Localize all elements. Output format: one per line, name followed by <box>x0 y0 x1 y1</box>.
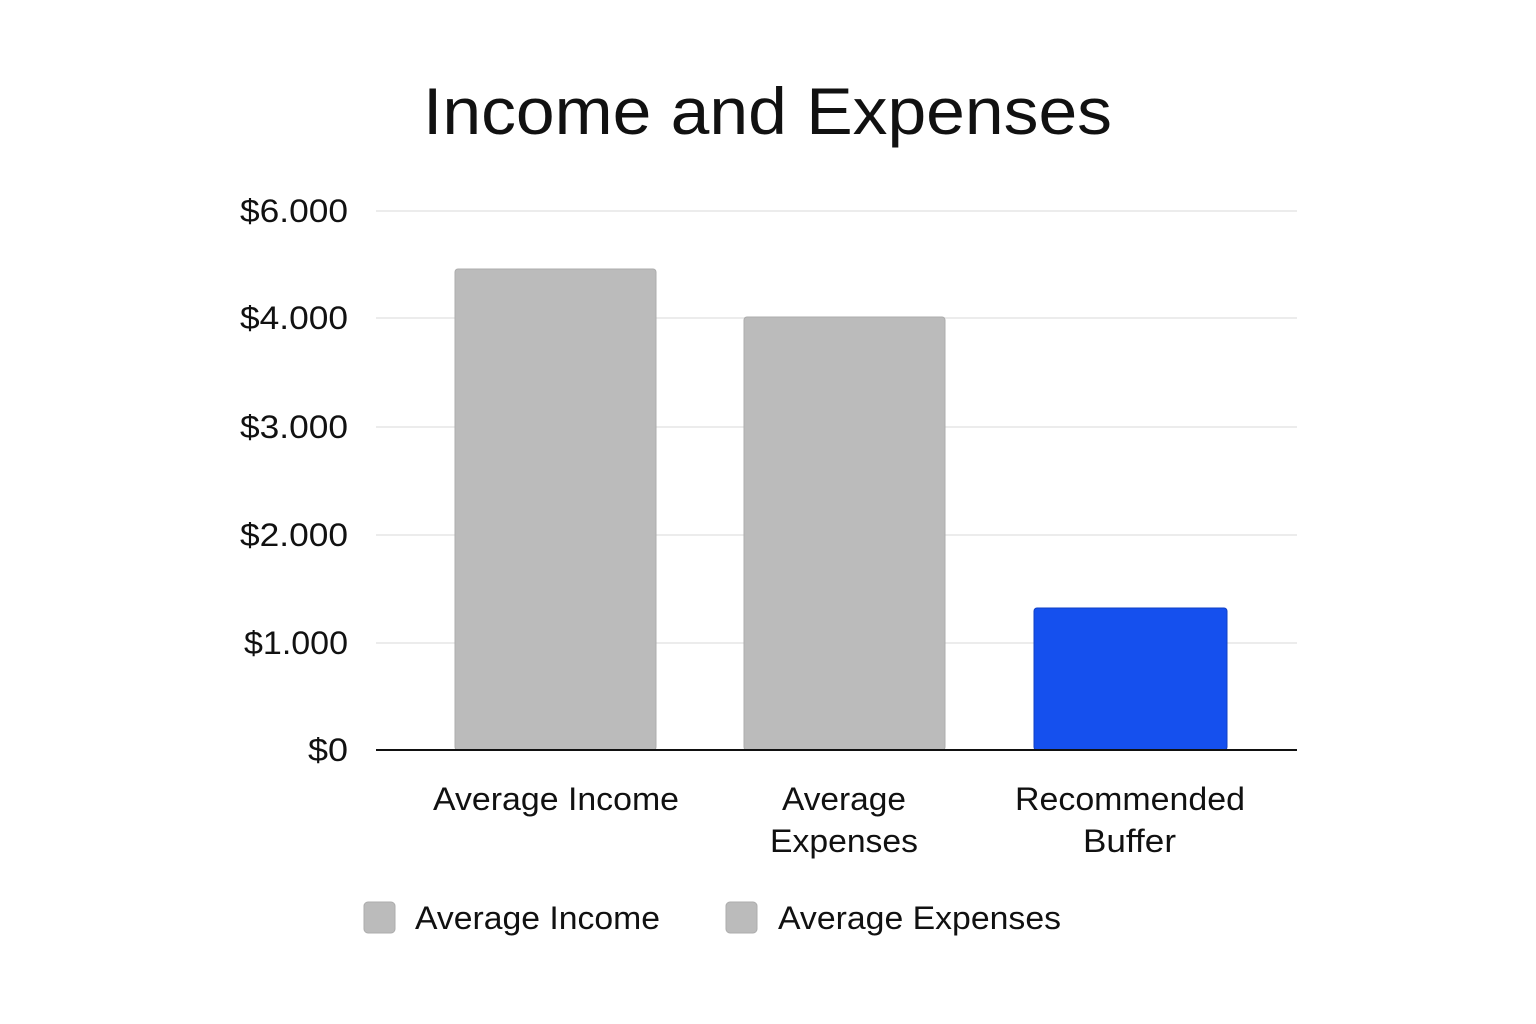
bar: recommended buffer <box>1034 608 1227 750</box>
y-axis labels: $0 <box>308 732 348 768</box>
bar: average income <box>455 269 656 750</box>
y-axis labels: $4.000 <box>240 300 348 336</box>
legend: Average Income <box>415 900 660 936</box>
y-axis labels: $6.000 <box>240 193 348 229</box>
legend: Average Expenses <box>778 900 1061 936</box>
y-axis labels: $3.000 <box>240 409 348 445</box>
x-axis labels: Average <box>782 781 906 817</box>
bar: average expenses <box>744 317 945 750</box>
y-axis labels <box>240 193 348 768</box>
x-axis labels: Expenses <box>770 823 918 859</box>
x-axis labels: Recommended <box>1015 781 1245 817</box>
x-axis labels: Buffer <box>1083 823 1176 859</box>
y-axis labels: $1.000 <box>244 625 348 661</box>
bars <box>455 269 1227 750</box>
x-axis labels <box>433 781 1245 859</box>
x-axis labels: Average Income <box>433 781 679 817</box>
title: Income and Expenses <box>423 74 1112 148</box>
legend <box>364 900 1061 936</box>
y-axis labels: $2.000 <box>240 517 348 553</box>
